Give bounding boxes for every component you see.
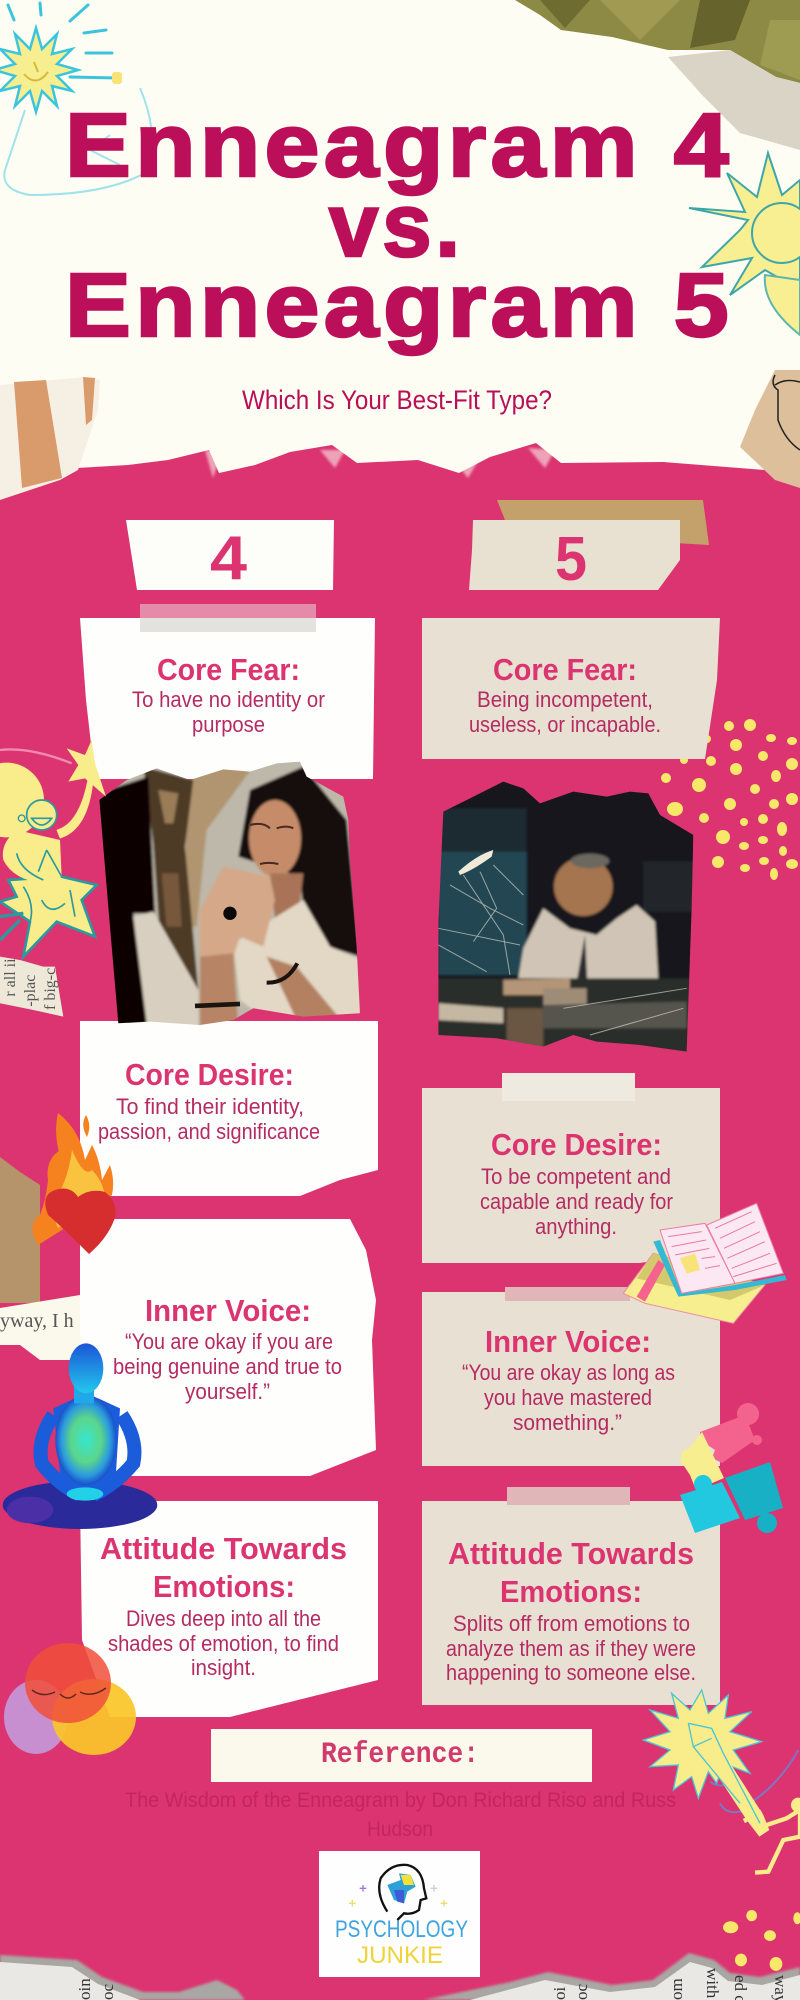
body text: [108, 1606, 339, 1680]
torn white streaks on pink edge: [205, 448, 555, 478]
heading: Emotions:: [500, 1574, 642, 1609]
illustration: overlapping faces venn: [4, 1643, 136, 1755]
torn paper with orange stripe left: [0, 377, 100, 500]
body text: “You are okay as long as: [462, 1360, 675, 1385]
yellow piece: [680, 1432, 724, 1490]
torn kraft paper left: [0, 1157, 40, 1303]
subtitle: Which Is Your Best-Fit Type?: [242, 385, 552, 415]
heading: [448, 1536, 694, 1609]
title: [65, 96, 733, 356]
reference citation: Hudson: [367, 1818, 433, 1841]
card: type 5 core fear: [422, 618, 720, 759]
newspaper scrap: -plac: [22, 975, 39, 1007]
body text: yourself.”: [185, 1379, 270, 1404]
card: type 4 inner voice: [80, 1219, 376, 1476]
body text: anything.: [535, 1214, 617, 1239]
card: type 4 attitude towards emotions: [80, 1501, 378, 1717]
tape: [505, 1287, 630, 1301]
newspaper strip left: yway, I h: [0, 1310, 74, 1332]
body text: purpose: [192, 712, 265, 737]
number card 5: [469, 520, 680, 594]
tape: [502, 1073, 635, 1101]
body text: being genuine and true to: [113, 1354, 342, 1379]
body text: “You are okay if you are: [125, 1329, 333, 1354]
body text: [462, 1360, 675, 1435]
yellow dots: [723, 1910, 800, 1971]
heading: Core Fear:: [157, 652, 300, 687]
heading: Core Fear:: [493, 652, 637, 687]
body text: analyze them as if they were: [446, 1636, 696, 1661]
torn newspaper bottom right: with: [703, 1968, 722, 1999]
heading: Core Desire:: [491, 1127, 662, 1162]
illustration: flaming heart: [32, 1113, 116, 1254]
heading: Emotions:: [153, 1569, 295, 1604]
reference citation: [125, 1789, 676, 1841]
photo: woman looking in ornate mirror: [90, 760, 370, 1030]
card: type 5 attitude towards emotions: [422, 1487, 720, 1705]
title: Enneagram 4: [65, 96, 733, 196]
heading: [100, 1531, 347, 1604]
body text: To have no identity or: [132, 687, 325, 712]
torn newspaper bottom right: oc: [572, 1984, 591, 2000]
body text: insight.: [191, 1655, 256, 1680]
body text: something.”: [513, 1410, 622, 1435]
illustration: meditating figure: [3, 1343, 157, 1529]
torn newspaper bottom right: om: [667, 1978, 686, 2000]
card: type 4 core fear: [80, 604, 375, 779]
newspaper scrap: f big-c: [42, 968, 59, 1010]
photo: stressed man at desk with cobwebs: [438, 782, 694, 1052]
heading: Attitude Towards: [100, 1531, 347, 1566]
body text: [469, 687, 661, 737]
body text: Splits off from emotions to: [453, 1611, 690, 1636]
doodle: sun with thumb top left: [0, 3, 152, 195]
tape: [507, 1487, 630, 1505]
number card 5: 5: [555, 525, 587, 594]
reference label box: [211, 1729, 592, 1782]
torn newspaper bottom right: [423, 1953, 800, 2000]
heading: Inner Voice:: [485, 1324, 651, 1359]
torn newspaper bottom left: oin: [75, 1978, 94, 2000]
tape: tan behind number 5: [497, 500, 709, 545]
title: Enneagram 5: [65, 256, 733, 356]
reference label box: Reference:: [321, 1738, 479, 1772]
body text: passion, and significance: [98, 1119, 320, 1144]
body text: happening to someone else.: [446, 1660, 696, 1685]
heading: Attitude Towards: [448, 1536, 694, 1571]
body text: useless, or incapable.: [469, 712, 661, 737]
body text: shades of emotion, to find: [108, 1631, 339, 1656]
newspaper scrap: r all ii: [2, 958, 19, 997]
logo: Psychology Junkie: [319, 1851, 480, 1977]
newspaper scrap: [0, 957, 63, 1017]
title: vs.: [329, 176, 464, 276]
yellow dot cluster right: [661, 719, 798, 880]
body text: To find their identity,: [116, 1094, 304, 1119]
heading: Core Desire:: [125, 1057, 294, 1092]
number card 4: 4: [210, 524, 248, 593]
body text: [132, 687, 325, 737]
head outline icon: [349, 1865, 447, 1920]
newspaper strip left: [0, 1295, 80, 1360]
torn olive landscape paper top right: [515, 0, 800, 83]
doodle: starburst and key figure bottom right: [643, 1690, 800, 1971]
card: type 4 core desire: [80, 1021, 378, 1196]
torn newspaper bottom right: oi: [550, 1986, 569, 2000]
wordmark: JUNKIE: [357, 1942, 443, 1969]
doodle: sun top right: [689, 153, 800, 335]
reference citation: The Wisdom of the Enneagram by Don Richard Riso and Russ: [125, 1789, 676, 1812]
card: type 5 core desire: [422, 1073, 720, 1263]
body text: you have mastered: [484, 1385, 652, 1410]
tape on card: [140, 604, 316, 632]
body text: To be competent and: [481, 1164, 671, 1189]
pink piece: [700, 1403, 762, 1463]
body text: [98, 1094, 320, 1144]
body text: Being incompetent,: [477, 687, 653, 712]
body text: Dives deep into all the: [126, 1606, 321, 1631]
body text: [113, 1329, 342, 1404]
wordmark: PSYCHOLOGY: [335, 1916, 468, 1943]
number card 4: [126, 520, 334, 593]
torn newspaper bottom left: oc: [98, 1984, 117, 2000]
body text: capable and ready for: [480, 1189, 673, 1214]
teal piece: [725, 1462, 783, 1533]
pink torn main panel: [0, 443, 800, 2000]
cyan piece: [680, 1475, 740, 1533]
torn newspaper bottom left: [0, 1955, 245, 2000]
body text: [446, 1611, 696, 1685]
body text: [480, 1164, 673, 1239]
card: type 5 inner voice: [422, 1287, 720, 1466]
illustration: yellow monkey on star: [0, 740, 106, 1017]
torn grey paper top right: [668, 50, 800, 150]
torn tan paper right: [740, 370, 800, 488]
wordmark: [335, 1916, 468, 1969]
illustration: open book on closed book: [623, 1203, 787, 1323]
illustration: puzzle pieces: [680, 1403, 783, 1533]
heading: Inner Voice:: [145, 1293, 311, 1328]
